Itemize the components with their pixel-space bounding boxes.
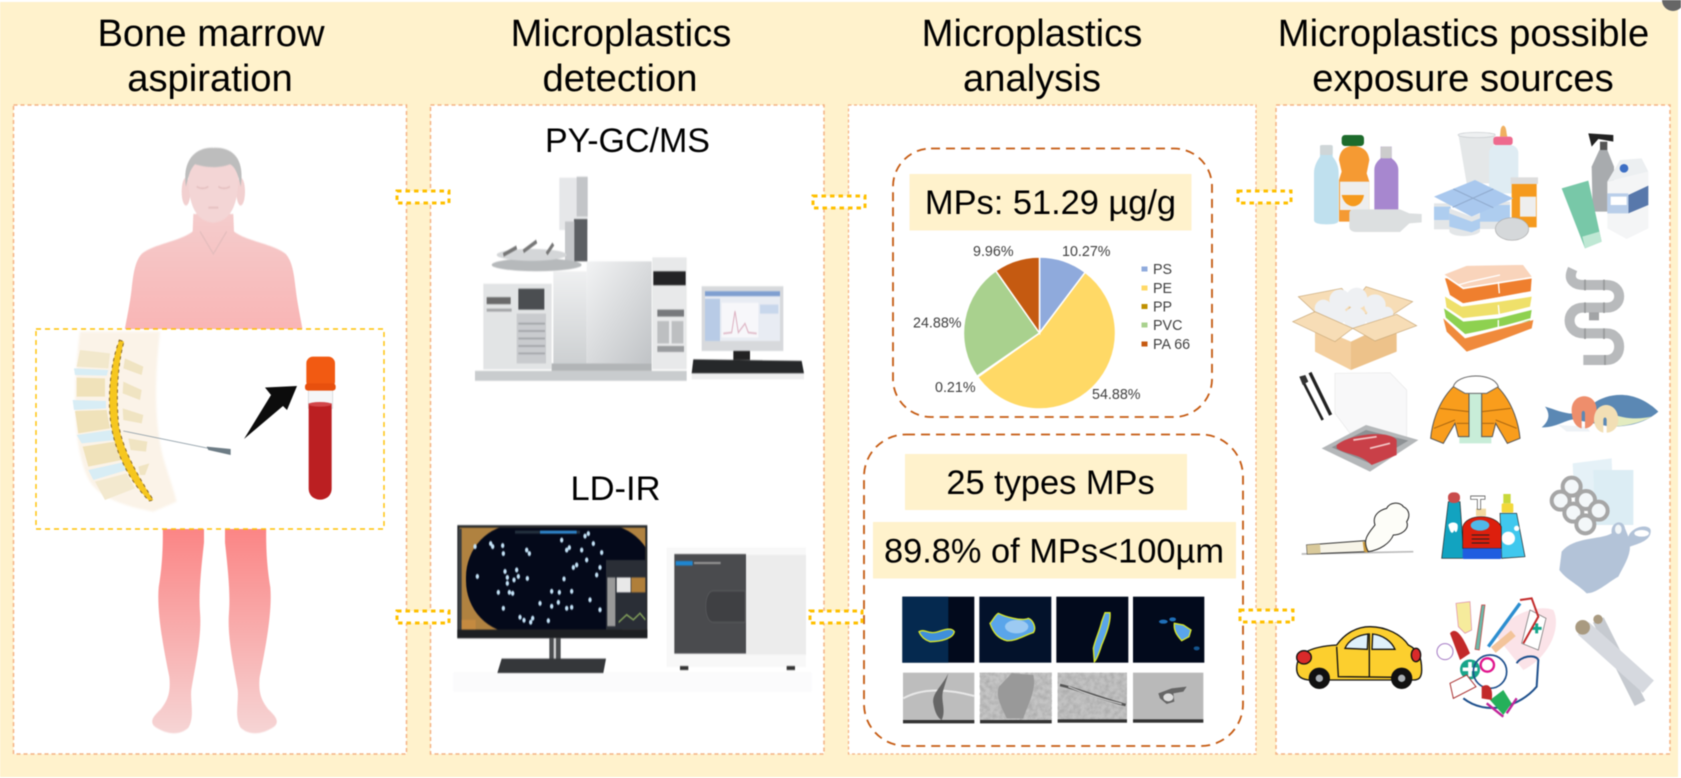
panel: bone marrow aspiration	[14, 105, 406, 754]
icon: cigarette and smoke	[1302, 503, 1413, 554]
icon: cups, baby bottle and yogurts	[1434, 126, 1538, 240]
connector: analysis to sources, lower	[1240, 610, 1293, 622]
spine illustration	[73, 332, 231, 512]
label: LD-IR: LD-IR	[570, 470, 661, 508]
pie legend: PS	[1153, 262, 1172, 278]
icon: fish and salmon steaks	[1542, 395, 1658, 433]
connector: detection to analysis, upper	[813, 196, 865, 208]
connector: aspiration to detection, upper	[397, 191, 449, 203]
pie data labels: 10.27%	[1062, 244, 1111, 260]
icon: plastic wrap rolls	[1575, 615, 1648, 703]
icon: spray bottle, tube and milk carton	[1562, 133, 1648, 248]
LD-IR monitor with particle image	[456, 524, 648, 674]
window corner badge	[1662, 0, 1681, 11]
pie data labels: 0.21%	[935, 380, 976, 396]
panel: microplastics detection	[430, 105, 824, 754]
pie legend: PE	[1153, 281, 1172, 297]
callout: MPs concentration: MPs: 51.29 µg/g	[925, 184, 1176, 222]
PY-GC/MS instrument	[475, 177, 804, 381]
connector: detection to analysis, lower	[810, 611, 862, 623]
connector: aspiration to detection, lower	[397, 611, 449, 623]
icon: box with packing peanuts	[1293, 287, 1417, 370]
heading: bone marrow aspiration: aspiration	[127, 57, 293, 100]
pie data labels: 9.96%	[973, 244, 1014, 260]
card: concentration and polymer pie	[893, 148, 1212, 417]
LD-IR instrument	[667, 548, 806, 670]
pie legend: PA 66	[1153, 337, 1190, 353]
pie legend: PP	[1153, 300, 1172, 316]
icon: yellow car	[1297, 627, 1422, 688]
heading: microplastics detection: Microplastics	[511, 12, 731, 55]
human body figure	[124, 148, 303, 733]
icon: stacked food trays	[1443, 264, 1533, 352]
panel: exposure sources	[1276, 105, 1670, 754]
callout: 25 types: 25 types MPs	[946, 464, 1155, 502]
icon: medical supplies	[1437, 598, 1556, 717]
connector: analysis to sources, upper	[1238, 191, 1291, 203]
pie legend: PVC	[1153, 318, 1182, 334]
callout: size share: 89.8% of MPs<100µm	[884, 532, 1224, 570]
pie chart: polymer composition	[963, 257, 1116, 409]
pie data labels	[913, 244, 1141, 403]
pie data labels: 24.88%	[913, 316, 962, 332]
icon: toiletries	[1442, 492, 1525, 559]
pie legend	[1142, 262, 1190, 353]
heading: microplastics detection: detection	[542, 57, 698, 100]
heading: bone marrow aspiration: Bone marrow	[97, 12, 325, 55]
callout: MPs concentration	[910, 174, 1192, 230]
blood collection tube	[305, 357, 336, 500]
icon: plastic pipe	[1570, 269, 1619, 365]
electron microscope images	[903, 673, 1203, 723]
heading: microplastics analysis: analysis	[963, 57, 1101, 100]
callout: size share	[873, 522, 1236, 578]
callout: 25 types	[905, 454, 1187, 510]
icon: plastic bags and six-pack rings	[1552, 458, 1651, 593]
icon: puffer jacket	[1431, 376, 1520, 443]
heading: possible exposure sources: Microplastics possible	[1278, 12, 1649, 55]
icon: bottles	[1314, 135, 1422, 232]
heading: possible exposure sources: exposure sources	[1312, 57, 1614, 100]
inset: spinal puncture and blood tube	[36, 329, 384, 529]
label: PY-GC/MS: PY-GC/MS	[545, 122, 710, 160]
pie data labels: 54.88%	[1092, 387, 1141, 403]
card: types, sizes and particle images	[864, 434, 1243, 746]
heading: microplastics analysis: Microplastics	[922, 12, 1142, 55]
arrow to tube	[244, 386, 297, 439]
icon: cutlery, foam box and meat tray	[1299, 373, 1418, 472]
panel: microplastics analysis	[848, 105, 1256, 754]
infrared particle images	[902, 597, 1204, 663]
